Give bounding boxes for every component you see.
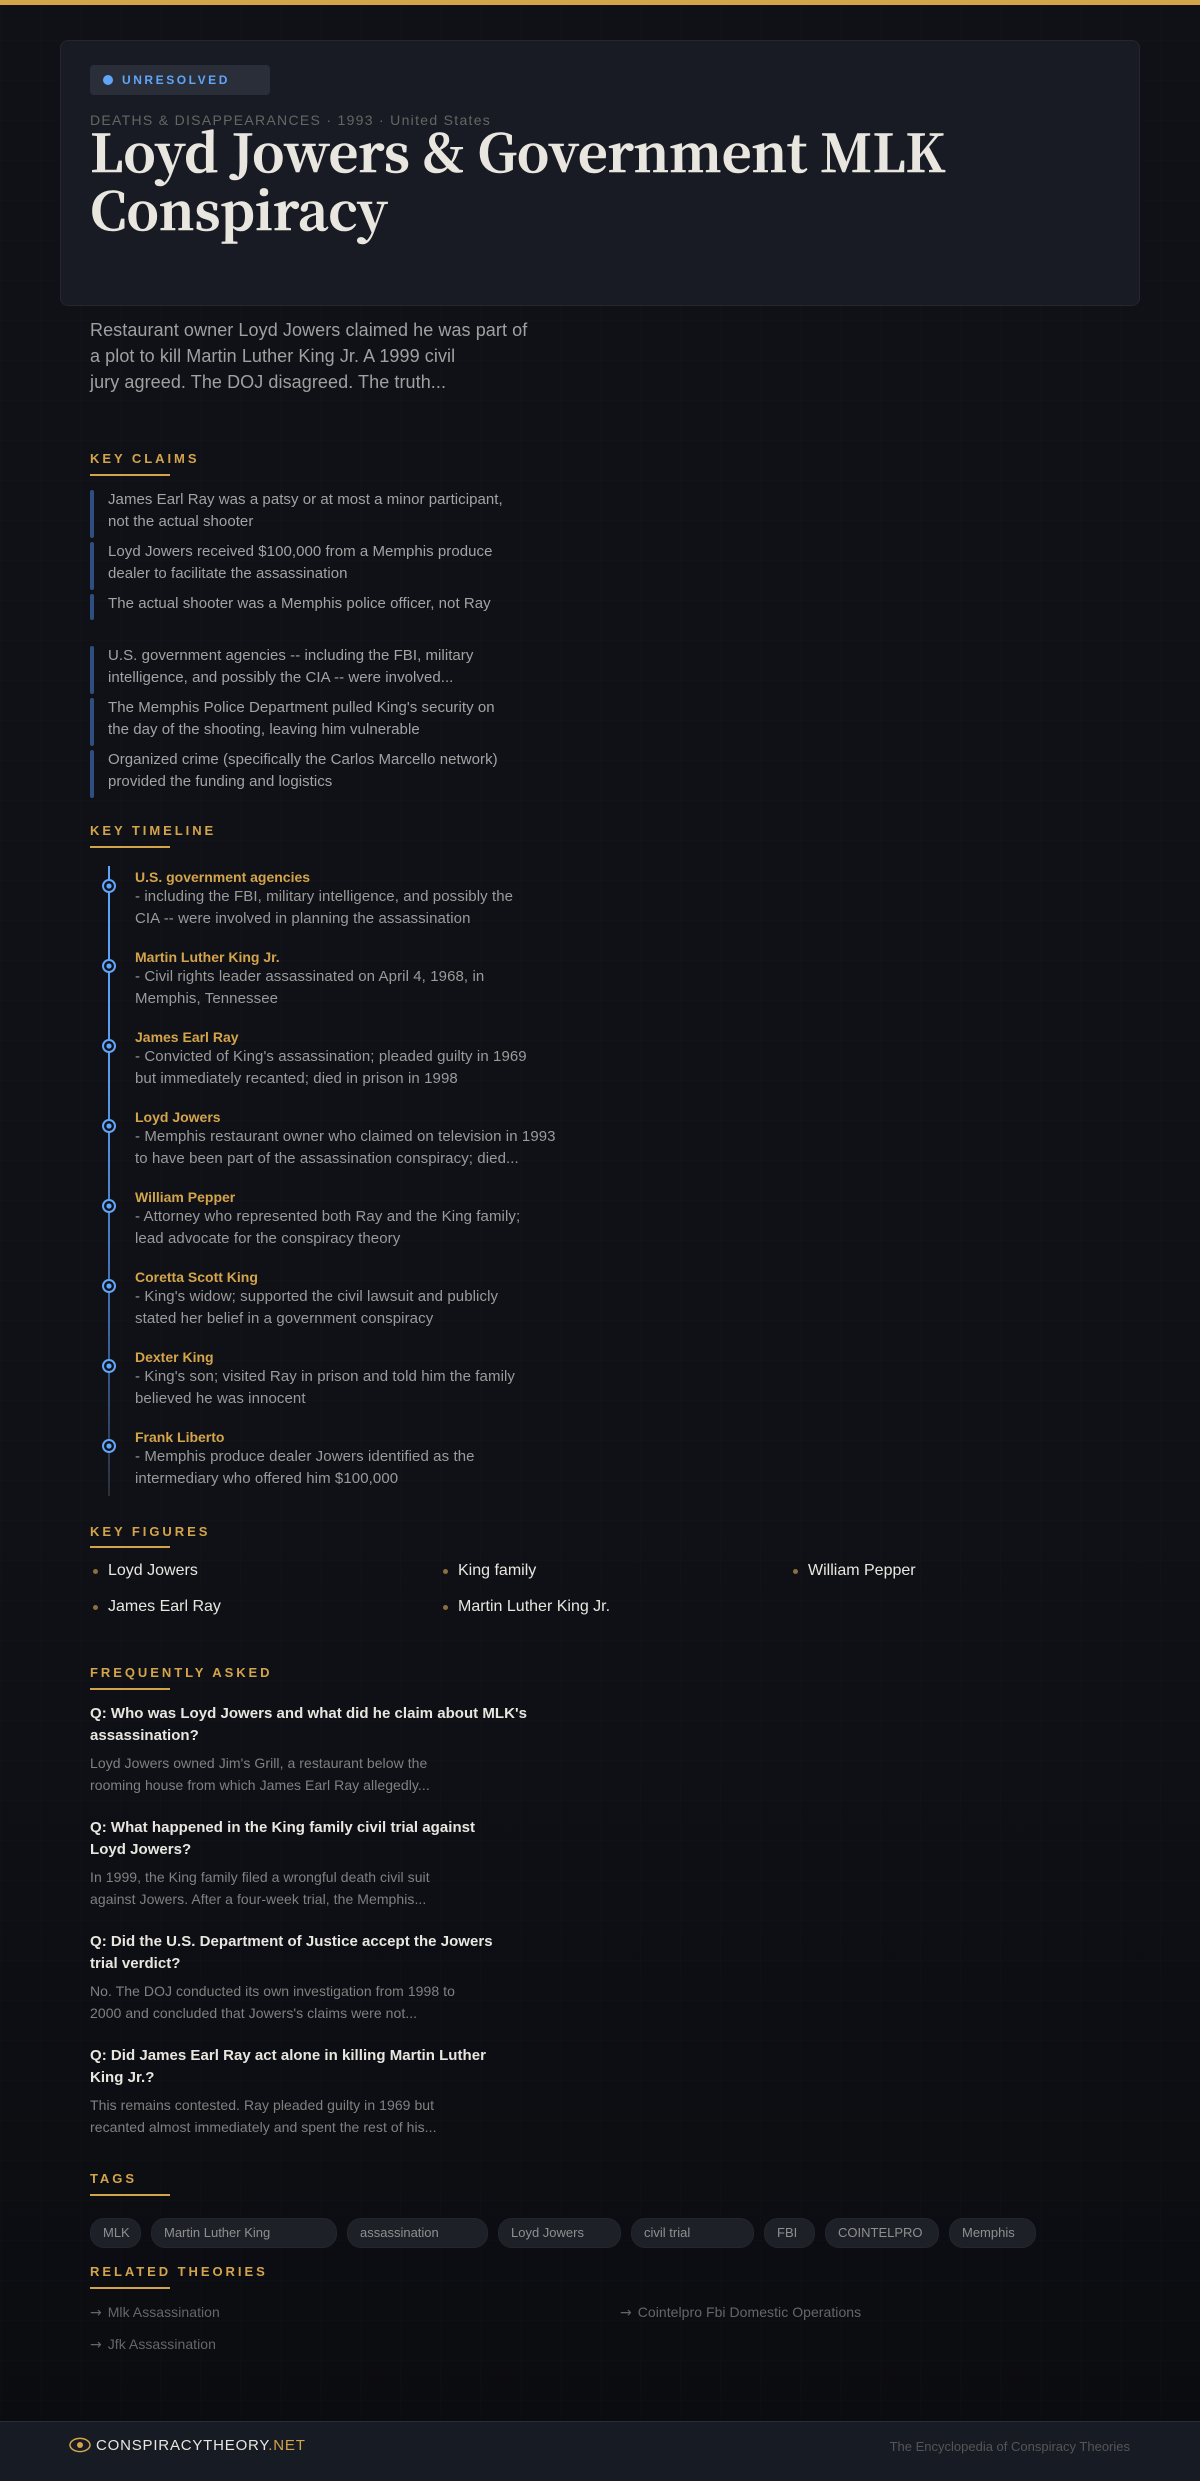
marker 7	[102, 1359, 116, 1373]
panel: key claims list	[90, 490, 503, 798]
FAQ item 3: No. The DOJ conducted its own investigation from 1998 to	[90, 1983, 455, 1999]
entry: Coretta Scott King	[135, 1269, 498, 1327]
heading: tags: TAGS	[90, 2171, 137, 2186]
FAQ item 3	[90, 1930, 570, 2030]
summary text: Restaurant owner Loyd Jowers claimed he was part of	[90, 320, 527, 340]
marker 4	[102, 1119, 116, 1133]
tag: COINTELPRO	[825, 2218, 939, 2248]
FAQ item 4: This remains contested. Ray pleaded guilty in 1969 but	[90, 2097, 434, 2113]
badge: unresolved	[90, 65, 270, 95]
entry: James Earl Ray	[135, 1029, 527, 1087]
tag: assassination	[347, 2218, 488, 2248]
FAQ item 1: assassination?	[90, 1727, 199, 1744]
FAQ item 3: 2000 and concluded that Jowers's claims were not...	[90, 2005, 417, 2021]
panel: key figures list	[93, 1562, 916, 1615]
figure: Loyd Jowers: Loyd Jowers	[108, 1562, 198, 1579]
title: Conspiracy	[90, 170, 388, 245]
summary text	[90, 320, 528, 392]
entry: U.S. government agencies: CIA -- were involved in planning the assassination	[135, 910, 471, 927]
FAQ item 1: Q: Who was Loyd Jowers and what did he claim about MLK's	[90, 1705, 527, 1722]
heading underline: key figures	[90, 1546, 170, 1548]
heading underline: key timeline	[90, 846, 170, 848]
entry: Coretta Scott King: - King's widow; supported the civil lawsuit and publicly	[135, 1288, 498, 1305]
tag: Martin Luther King: Martin Luther King	[164, 2225, 270, 2240]
claim 4: intelligence, and possibly the CIA -- were involved...	[108, 669, 453, 686]
FAQ item 2: In 1999, the King family filed a wrongful death civil suit	[90, 1869, 430, 1885]
footer brand: CONSPIRACYTHEORY.NET	[96, 2437, 306, 2454]
tag: Memphis: Memphis	[962, 2225, 1015, 2240]
FAQ item 1: Loyd Jowers owned Jim's Grill, a restaurant below the	[90, 1755, 427, 1771]
claim 5: The Memphis Police Department pulled King's security on	[108, 699, 495, 716]
tag: Memphis	[949, 2218, 1036, 2248]
claim 1: not the actual shooter	[108, 513, 253, 530]
link: Mlk Assassination: → Mlk Assassination	[90, 2304, 220, 2321]
entry: Frank Liberto	[135, 1429, 475, 1487]
link: Cointelpro Fbi Domestic Operations: → Cointelpro Fbi Domestic Operations	[620, 2304, 861, 2321]
link: Jfk Assassination: → Jfk Assassination	[90, 2336, 216, 2353]
entry: Dexter King: believed he was innocent	[135, 1390, 306, 1407]
marker 5	[102, 1199, 116, 1213]
footer tagline: The Encyclopedia of Conspiracy Theories	[890, 2439, 1130, 2454]
entry: James Earl Ray: but immediately recanted; died in prison in 1998	[135, 1070, 458, 1087]
timeline markers	[102, 879, 116, 1453]
entry: Loyd Jowers: - Memphis restaurant owner who claimed on television in 1993	[135, 1128, 556, 1145]
tag: MLK: MLK	[103, 2225, 130, 2240]
entry: Loyd Jowers: to have been part of the assassination conspiracy; died...	[135, 1150, 519, 1167]
heading: key figures: KEY FIGURES	[90, 1524, 210, 1539]
marker 2	[102, 959, 116, 973]
entry: Coretta Scott King: Coretta Scott King	[135, 1269, 258, 1285]
FAQ item 2: against Jowers. After a four-week trial, the Memphis...	[90, 1891, 426, 1907]
claim 4: U.S. government agencies -- including the FBI, military	[108, 647, 473, 664]
claim 6: provided the funding and logistics	[108, 773, 332, 790]
claim 6	[90, 750, 498, 798]
entry: Martin Luther King Jr.: Martin Luther King Jr.	[135, 949, 280, 965]
entry: William Pepper: lead advocate for the conspiracy theory	[135, 1230, 400, 1247]
figure: Martin Luther King Jr.: Martin Luther King Jr.	[458, 1598, 610, 1615]
claim 1: James Earl Ray was a patsy or at most a minor participant,	[108, 491, 503, 508]
entry: Loyd Jowers: Loyd Jowers	[135, 1109, 221, 1125]
entry: Martin Luther King Jr.	[135, 949, 484, 1007]
summary text: jury agreed. The DOJ disagreed. The truth...	[90, 372, 446, 392]
entry: Dexter King: - King's son; visited Ray in prison and told him the family	[135, 1368, 515, 1385]
FAQ item 4: Q: Did James Earl Ray act alone in killing Martin Luther	[90, 2047, 486, 2064]
entry: Martin Luther King Jr.: Memphis, Tennessee	[135, 990, 278, 1007]
FAQ item 3: Q: Did the U.S. Department of Justice accept the Jowers	[90, 1933, 493, 1950]
FAQ item 4: recanted almost immediately and spent the rest of his...	[90, 2119, 437, 2135]
FAQ item 3: trial verdict?	[90, 1955, 180, 1972]
heading underline: tags	[90, 2194, 170, 2196]
tag: MLK	[90, 2218, 141, 2248]
claim 4	[90, 646, 474, 694]
claim 5	[90, 698, 495, 746]
entry: James Earl Ray: James Earl Ray	[135, 1029, 239, 1045]
figure: James Earl Ray: James Earl Ray	[108, 1598, 221, 1615]
timeline spine	[108, 866, 110, 1496]
top accent bar	[0, 0, 1200, 5]
panel: header card	[60, 40, 1140, 306]
figure: William Pepper: William Pepper	[808, 1562, 916, 1579]
FAQ item 1: rooming house from which James Earl Ray allegedly...	[90, 1777, 430, 1793]
marker 8	[102, 1439, 116, 1453]
claim 5: the day of the shooting, leaving him vulnerable	[108, 721, 420, 738]
entry: James Earl Ray: - Convicted of King's assassination; pleaded guilty in 1969	[135, 1048, 527, 1065]
claim 3: The actual shooter was a Memphis police officer, not Ray	[108, 595, 491, 612]
footer	[0, 2421, 1200, 2481]
entry: Loyd Jowers	[135, 1109, 556, 1167]
tag: Loyd Jowers: Loyd Jowers	[511, 2225, 584, 2240]
claim 2	[90, 542, 492, 590]
FAQ item 2	[90, 1819, 475, 1907]
claim 1	[90, 490, 503, 538]
entry: Martin Luther King Jr.: - Civil rights leader assassinated on April 4, 1968, in	[135, 968, 484, 985]
entry: Frank Liberto: - Memphis produce dealer Jowers identified as the	[135, 1448, 475, 1465]
category meta line: DEATHS & DISAPPEARANCES · 1993 · United States	[90, 112, 491, 128]
figure: King family: King family	[458, 1562, 536, 1579]
claim 2: Loyd Jowers received $100,000 from a Memphis produce	[108, 543, 492, 560]
tag: Loyd Jowers	[498, 2218, 621, 2248]
panel: related theories links	[90, 2302, 890, 2354]
FAQ item 4: King Jr.?	[90, 2069, 154, 2086]
marker 3	[102, 1039, 116, 1053]
panel: timeline	[102, 866, 556, 1496]
badge label: UNRESOLVED	[122, 73, 230, 87]
icon: eye logo	[69, 2436, 91, 2454]
entry: Frank Liberto: intermediary who offered him $100,000	[135, 1470, 398, 1487]
tag: civil trial	[631, 2218, 754, 2248]
heading: key timeline: KEY TIMELINE	[90, 823, 216, 838]
entry: U.S. government agencies: U.S. government agencies	[135, 869, 310, 885]
claim 6: Organized crime (specifically the Carlos Marcello network)	[108, 751, 498, 768]
entry: William Pepper: - Attorney who represented both Ray and the King family;	[135, 1208, 520, 1225]
tag: COINTELPRO: COINTELPRO	[838, 2225, 923, 2240]
tag: FBI	[764, 2218, 815, 2248]
heading underline: frequently asked	[90, 1688, 170, 1690]
FAQ item 4	[90, 2044, 570, 2144]
FAQ item 2: Loyd Jowers?	[90, 1841, 191, 1858]
title	[90, 112, 946, 245]
entry: William Pepper	[135, 1189, 520, 1247]
summary text: a plot to kill Martin Luther King Jr. A 1999 civil	[90, 346, 455, 366]
heading underline: related theories	[90, 2287, 170, 2289]
claim 2: dealer to facilitate the assassination	[108, 565, 348, 582]
marker 6	[102, 1279, 116, 1293]
entry: U.S. government agencies: - including the FBI, military intelligence, and possibly the	[135, 888, 513, 905]
heading: related theories: RELATED THEORIES	[90, 2264, 268, 2279]
entry: U.S. government agencies	[135, 869, 513, 927]
heading: frequently asked: FREQUENTLY ASKED	[90, 1665, 273, 1680]
tag: assassination: assassination	[360, 2225, 439, 2240]
tag: Martin Luther King	[151, 2218, 337, 2248]
panel: FAQ	[90, 1705, 527, 2135]
entry: Dexter King	[135, 1349, 515, 1407]
FAQ item 1	[90, 1705, 527, 1793]
tag: civil trial: civil trial	[644, 2225, 690, 2240]
panel: tags row	[90, 2218, 1040, 2248]
icon: status dot	[103, 75, 113, 85]
entry: Coretta Scott King: stated her belief in a government conspiracy	[135, 1310, 433, 1327]
title: Loyd Jowers & Government MLK	[90, 112, 945, 187]
entry: William Pepper: William Pepper	[135, 1189, 235, 1205]
FAQ item 2: Q: What happened in the King family civil trial against	[90, 1819, 475, 1836]
entry: Frank Liberto: Frank Liberto	[135, 1429, 224, 1445]
entry: Dexter King: Dexter King	[135, 1349, 214, 1365]
heading: key claims: KEY CLAIMS	[90, 451, 199, 466]
heading underline: key claims	[90, 474, 170, 476]
claim 3	[90, 594, 491, 620]
marker 1	[102, 879, 116, 893]
tag: FBI: FBI	[777, 2225, 797, 2240]
